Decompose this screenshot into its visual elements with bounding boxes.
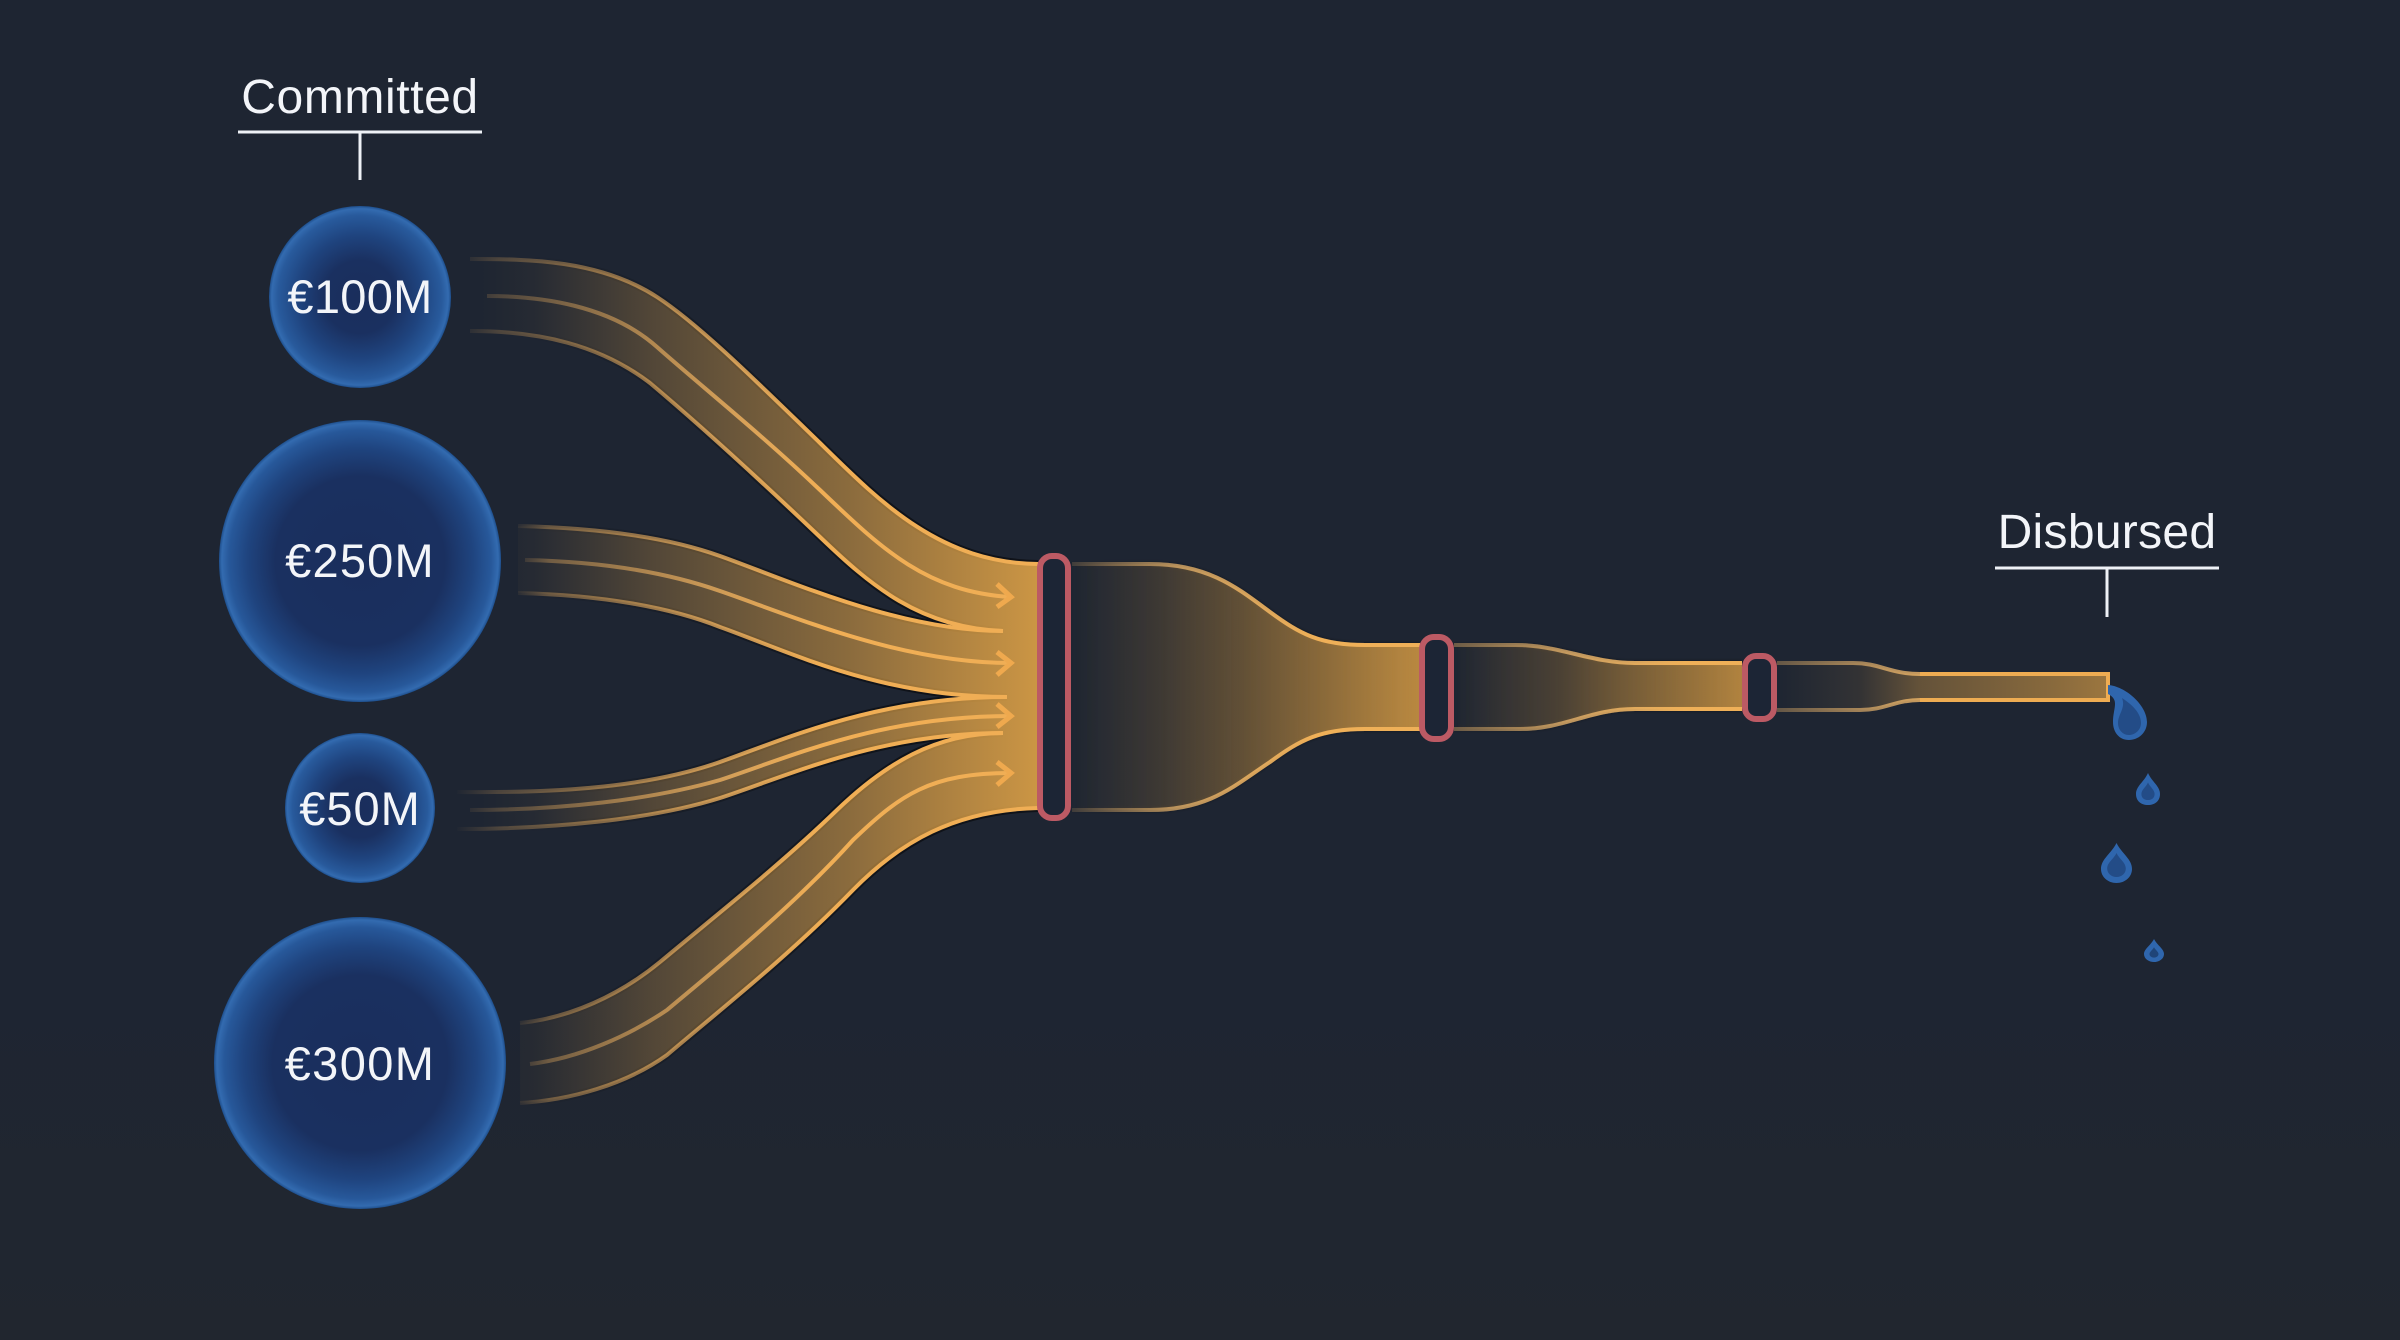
circle: €50M bbox=[285, 733, 435, 883]
stream lines from €300M bbox=[520, 733, 1038, 1103]
stream lines from €50M bbox=[457, 697, 1011, 829]
inflow streams converging on the first bottleneck bbox=[457, 259, 1038, 1103]
circle: €100M: €100M bbox=[287, 270, 433, 323]
icon: drop 4 bbox=[2144, 939, 2164, 962]
bottleneck ring 1 bbox=[1040, 556, 1068, 818]
circle: €300M: €300M bbox=[285, 1037, 435, 1090]
stream edge shadows bbox=[457, 259, 1038, 1103]
circle: €250M: €250M bbox=[285, 534, 435, 587]
stream fills and merge zone bbox=[457, 259, 1038, 1103]
circle: €100M bbox=[269, 206, 451, 388]
bottleneck ring 2 bbox=[1422, 637, 1451, 739]
icon: drop 3 bbox=[2101, 843, 2132, 883]
funnel section 1 bbox=[1072, 564, 1420, 810]
bottleneck ring 3 bbox=[1745, 656, 1774, 719]
circle: €300M bbox=[214, 917, 506, 1209]
label: Committed bbox=[238, 71, 482, 180]
stream lines from €100M bbox=[470, 259, 1038, 631]
label: Disbursed: Disbursed bbox=[1998, 506, 2216, 559]
funnel section 3 and outlet spout bbox=[1777, 663, 2108, 710]
stream lines from €250M bbox=[518, 526, 1011, 697]
circle: €50M: €50M bbox=[299, 782, 421, 835]
icon: drop forming at outlet bbox=[2108, 685, 2147, 740]
circle: €250M bbox=[219, 420, 501, 702]
label: Disbursed bbox=[1995, 506, 2219, 617]
arrowheads bbox=[997, 584, 1011, 785]
funnel section 2 bbox=[1454, 645, 1742, 729]
icon: drop 2 bbox=[2136, 773, 2160, 805]
label: Committed: Committed bbox=[241, 71, 479, 124]
